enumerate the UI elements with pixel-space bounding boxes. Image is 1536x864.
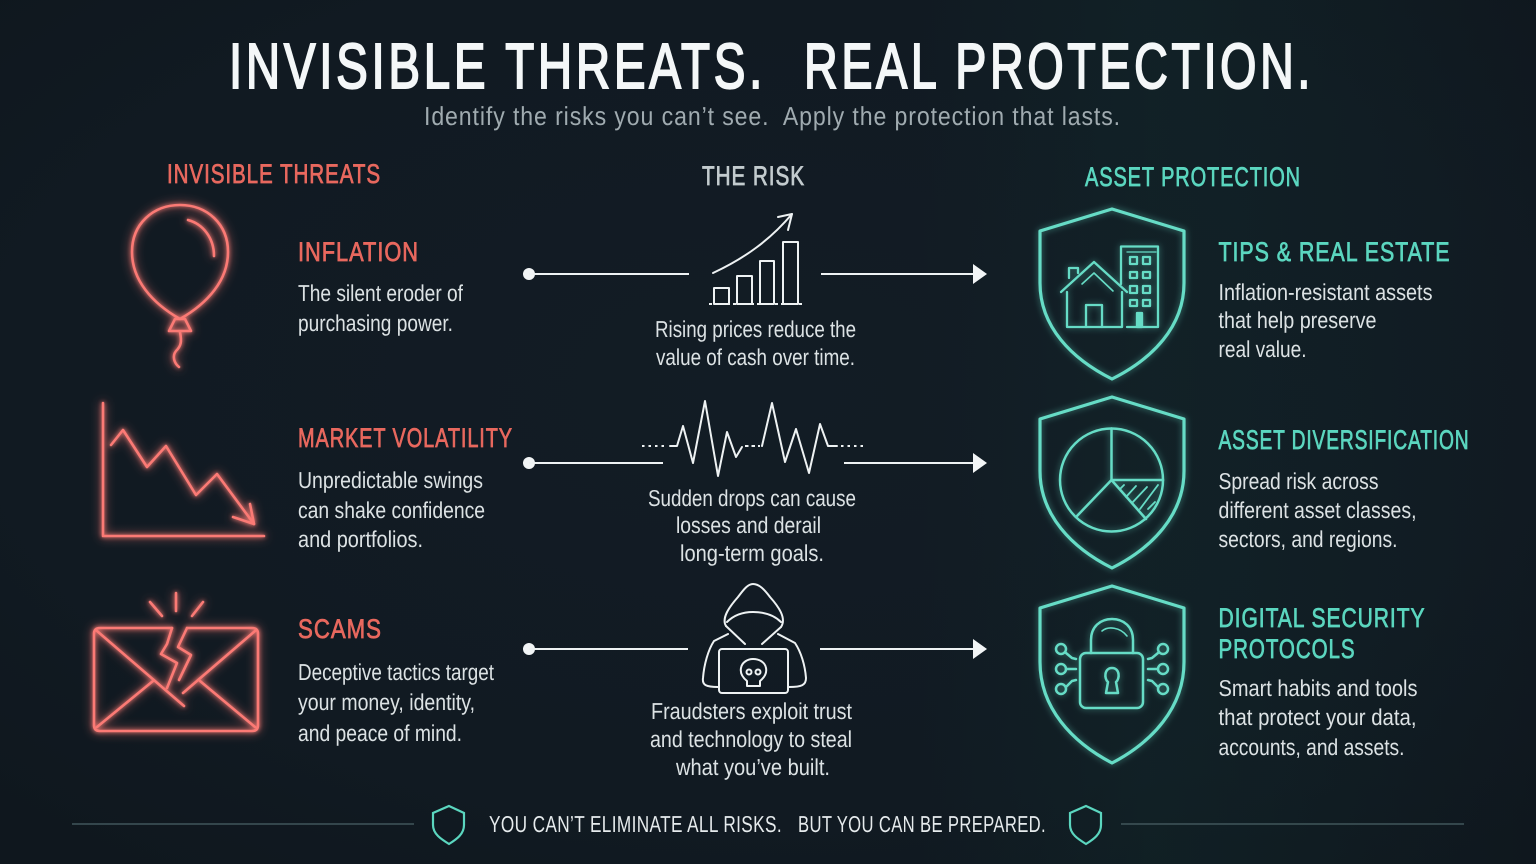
text: asset diversification: Spread risk across [1218, 468, 1378, 494]
text: tips and real estate: that help preserve [1218, 307, 1376, 333]
text: tips and real estate: TIPS & REAL ESTATE [1218, 237, 1450, 267]
text: scams: SCAMS [298, 614, 382, 644]
icon: shield with house and building [1040, 209, 1184, 379]
heading: invisible threats: INVISIBLE THREATS [167, 159, 381, 189]
icon: balloon [132, 205, 228, 367]
text: digital security protocols [1218, 603, 1426, 760]
text: market volatility [298, 423, 513, 552]
heading: the risk: THE RISK [702, 161, 805, 191]
text: market volatility: Unpredictable swings [298, 467, 483, 493]
text: scams [298, 614, 494, 746]
text: market volatility: MARKET VOLATILITY [298, 423, 513, 453]
text: market volatility: and portfolios. [298, 526, 423, 552]
text: tips and real estate: Inflation-resistant assets [1218, 279, 1432, 305]
text: sudden drops: losses and derail [676, 512, 821, 538]
arrow: scams connector [523, 639, 987, 659]
footer message: YOU CAN’T ELIMINATE ALL RISKS. [489, 811, 782, 837]
panel: invisible threats [94, 159, 513, 746]
text: tips and real estate: real value. [1218, 336, 1306, 362]
text: scams: Deceptive tactics target [298, 659, 494, 685]
icon: falling chart [103, 403, 264, 536]
text: rising prices: Rising prices reduce the [655, 316, 856, 342]
text: scams: and peace of mind. [298, 720, 462, 746]
title [229, 30, 1314, 102]
icon: shield with pie chart [1040, 397, 1184, 568]
text: inflation: The silent eroder of [298, 280, 463, 306]
icon: footer shield right [1070, 806, 1101, 844]
panel: asset protection [1040, 162, 1470, 763]
icon: hooded hacker with laptop [703, 584, 806, 693]
footer banner [72, 806, 1464, 844]
text: fraudsters [650, 698, 853, 780]
text: sudden drops [648, 485, 856, 566]
text: rising prices [655, 316, 856, 370]
text: fraudsters: and technology to steal [650, 726, 852, 752]
text: digital security protocols: Smart habits and tools [1218, 675, 1418, 701]
text: inflation: INFLATION [298, 237, 419, 267]
text: digital security protocols: DIGITAL SECURITY [1218, 603, 1426, 633]
icon: shield with padlock and circuits [1040, 586, 1184, 763]
text: sudden drops: Sudden drops can cause [648, 485, 856, 511]
text: fraudsters: what you’ve built. [675, 754, 830, 780]
icon: footer shield left [433, 806, 464, 844]
arrow: volatility connector [523, 453, 987, 473]
text: sudden drops: long-term goals. [680, 540, 824, 566]
text: asset diversification [1218, 425, 1470, 552]
text: fraudsters: Fraudsters exploit trust [651, 698, 853, 724]
text: inflation [298, 237, 463, 336]
text: digital security protocols: accounts, and assets. [1218, 734, 1404, 760]
heading: asset protection: ASSET PROTECTION [1085, 162, 1301, 192]
footer message: BUT YOU CAN BE PREPARED. [798, 811, 1046, 837]
text: digital security protocols: that protect your data, [1218, 704, 1416, 730]
text: asset diversification: different asset classes, [1218, 497, 1416, 523]
icon: rising bars [709, 214, 802, 304]
text: rising prices: value of cash over time. [656, 344, 855, 370]
title: INVISIBLE THREATS. [229, 30, 766, 102]
text: digital security protocols: PROTOCOLS [1218, 634, 1356, 664]
title: REAL PROTECTION. [804, 30, 1314, 102]
panel: the risk [523, 161, 987, 780]
text: inflation: purchasing power. [298, 310, 453, 336]
subtitle: Identify the risks you can’t see. Apply the protection that lasts. [424, 101, 1121, 131]
text: tips and real estate [1218, 237, 1450, 362]
text: scams: your money, identity, [298, 689, 475, 715]
text: asset diversification: sectors, and regions. [1218, 526, 1398, 552]
arrow: inflation connector [523, 264, 987, 284]
icon: broken envelope [94, 593, 258, 731]
icon: pulse line [642, 401, 864, 476]
text: market volatility: can shake confidence [298, 497, 485, 523]
